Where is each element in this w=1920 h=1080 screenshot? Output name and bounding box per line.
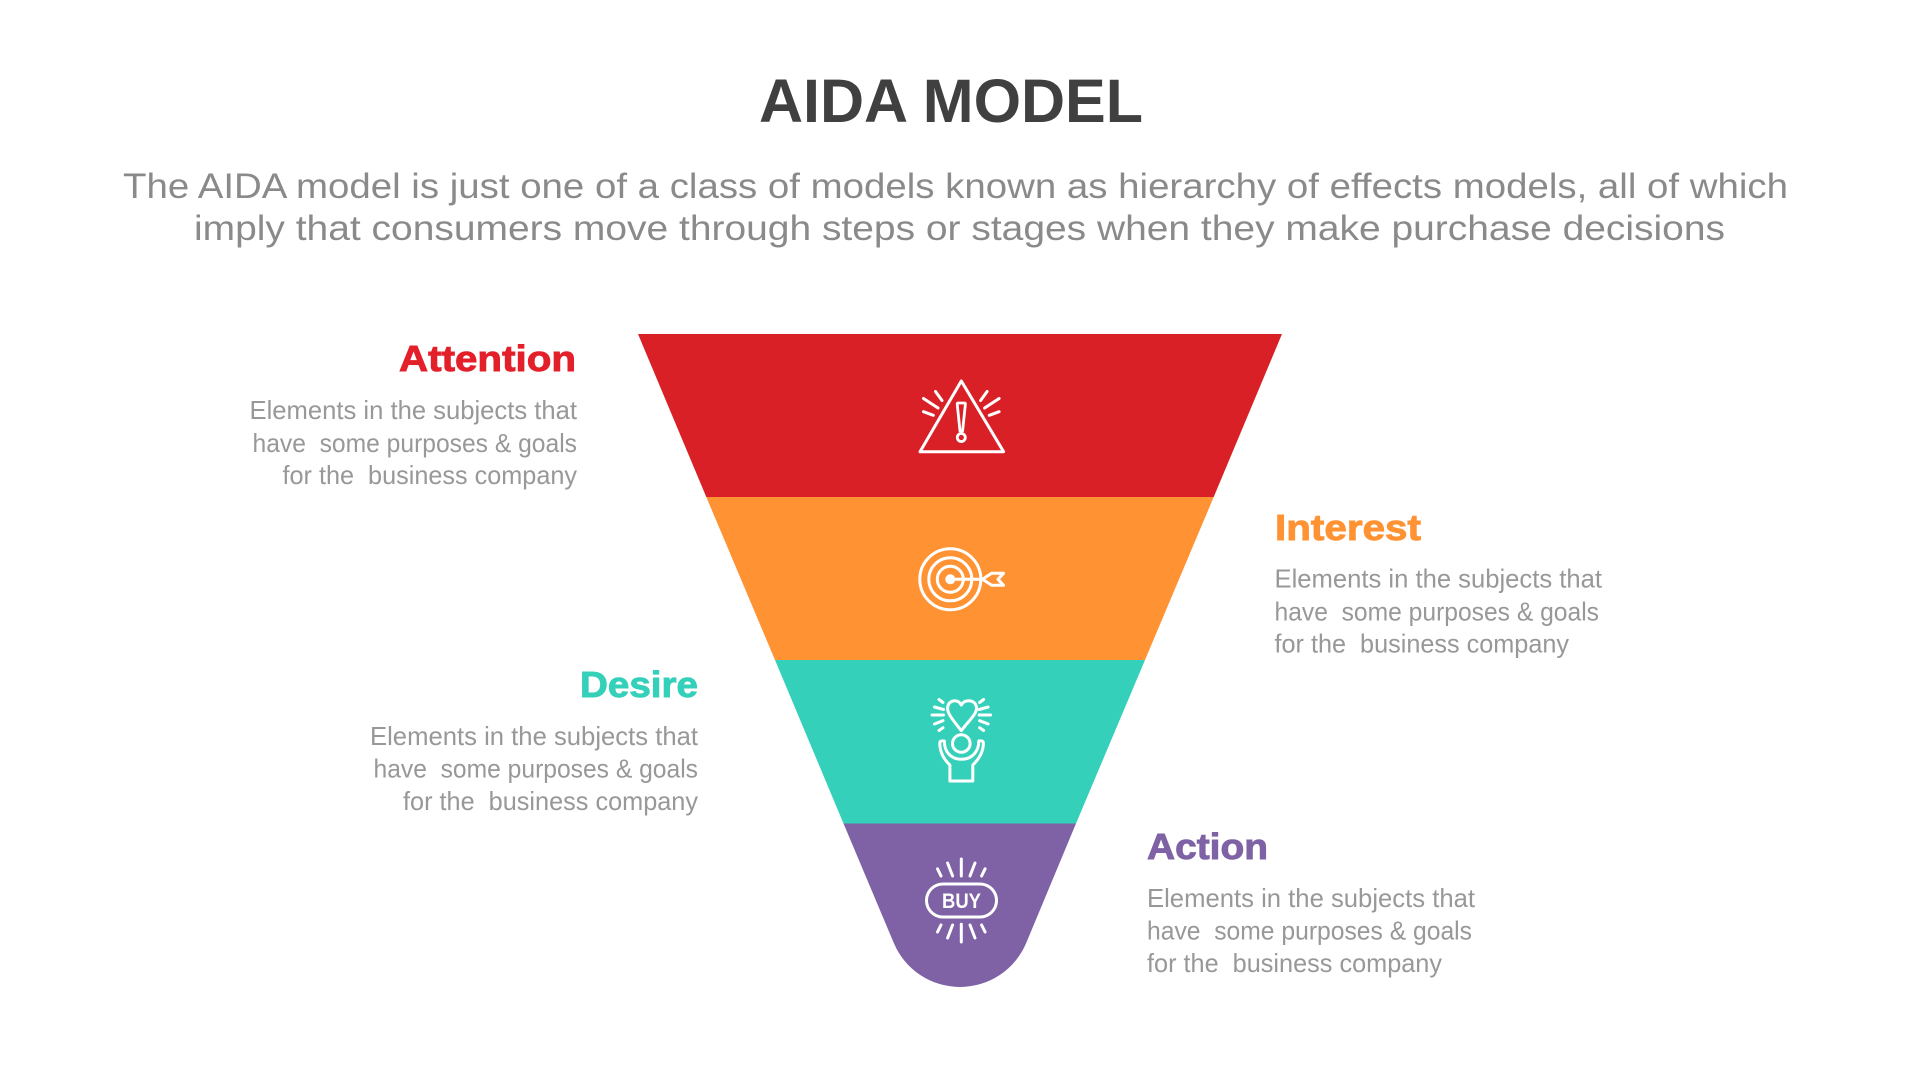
subtitle: [123, 167, 1788, 248]
text block: desire: [370, 664, 699, 816]
heading: action: Action: [1147, 826, 1268, 867]
subtitle: The AIDA model is just one of a class of models known as hierarchy of effects models, all of which: [123, 167, 1788, 206]
description: attention: [250, 395, 578, 490]
subtitle: imply that consumers move through steps or stages when they make purchase decisions: [194, 209, 1725, 248]
description: desire: have some purposes & goals: [374, 754, 698, 784]
description: action: Elements in the subjects that: [1147, 883, 1476, 913]
text block: action: [1147, 826, 1476, 978]
description: interest: [1274, 564, 1603, 658]
icon: warning triangle: [920, 381, 1004, 452]
description: attention: have some purposes & goals: [252, 428, 577, 458]
panel: action funnel tip: [844, 824, 1076, 987]
heading: desire: Desire: [580, 664, 698, 705]
icon: heart and raised hands: [932, 700, 991, 781]
description: desire: Elements in the subjects that: [370, 721, 699, 751]
icon: target with arrow: [920, 549, 1004, 610]
description: interest: Elements in the subjects that: [1274, 564, 1603, 594]
heading: interest: Interest: [1275, 507, 1421, 548]
panel: interest funnel band: [706, 497, 1214, 660]
description: action: [1147, 883, 1476, 978]
icon: buy button with rays: [926, 859, 996, 942]
description: action: for the business company: [1147, 948, 1442, 978]
description: attention: Elements in the subjects that: [250, 395, 578, 425]
panel: attention funnel band: [638, 334, 1282, 497]
text block: attention: [250, 338, 578, 490]
description: interest: have some purposes & goals: [1274, 596, 1599, 626]
description: desire: for the business company: [403, 786, 698, 816]
description: attention: for the business company: [282, 460, 577, 490]
title: AIDA MODEL: [759, 67, 1143, 135]
icon: buy button with rays: BUY: [942, 889, 981, 913]
text block: interest: [1274, 507, 1603, 658]
description: interest: for the business company: [1274, 628, 1569, 658]
description: action: have some purposes & goals: [1147, 916, 1472, 946]
heading: attention: Attention: [399, 338, 576, 379]
description: desire: [370, 721, 699, 816]
panel: desire funnel band: [775, 660, 1145, 824]
